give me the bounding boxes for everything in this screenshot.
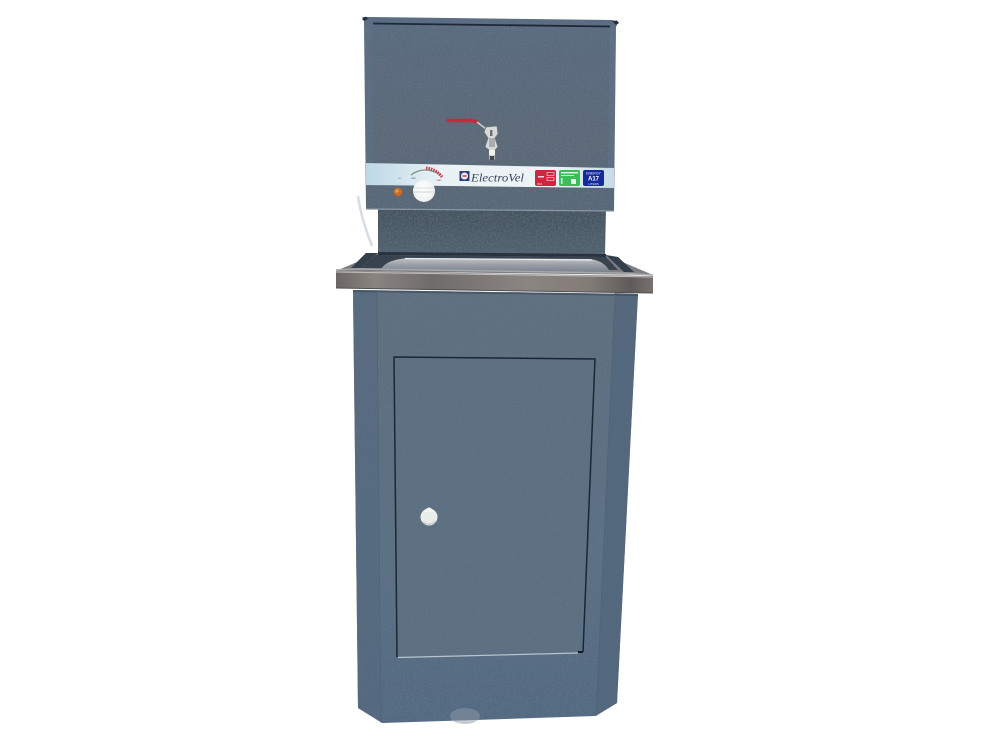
- faucet: [448, 120, 498, 160]
- temperature knob: [413, 180, 435, 202]
- blue badge: [583, 170, 604, 186]
- blue badge: A17: [588, 176, 600, 182]
- cabinet door: [394, 357, 595, 658]
- power cable: [358, 196, 372, 246]
- temperature dial scale: max: [436, 178, 442, 182]
- blue badge: ENERGY: [586, 172, 602, 176]
- temperature dial scale: on: [398, 176, 402, 180]
- red badge: [535, 170, 556, 186]
- basin: [381, 258, 610, 272]
- brand name: ElectroVel: [470, 170, 525, 184]
- blue badge: LITERS: [588, 182, 599, 186]
- floor reflection: [450, 708, 480, 724]
- tank side facets: [364, 21, 373, 162]
- brand logo: [460, 171, 470, 181]
- green badge: [559, 170, 580, 186]
- indicator lamp: [394, 188, 402, 196]
- temperature dial scale: [398, 168, 442, 182]
- tank lid: [362, 17, 618, 27]
- temperature dial scale: min: [411, 176, 416, 180]
- sink front rim: [336, 271, 653, 293]
- cabinet right facet: [596, 293, 638, 716]
- panel: cabinet: [353, 290, 638, 724]
- panel: steel sink: [336, 252, 653, 293]
- control band: [366, 163, 614, 188]
- sink deck: [336, 253, 653, 275]
- door knob: [420, 508, 438, 526]
- faucet red handle: [448, 120, 477, 122]
- faucet body: [484, 126, 498, 160]
- panel: back splash: [378, 208, 606, 254]
- red badge: IP24: [537, 183, 543, 186]
- panel: water tank: [362, 16, 619, 211]
- cabinet left facet: [353, 290, 381, 722]
